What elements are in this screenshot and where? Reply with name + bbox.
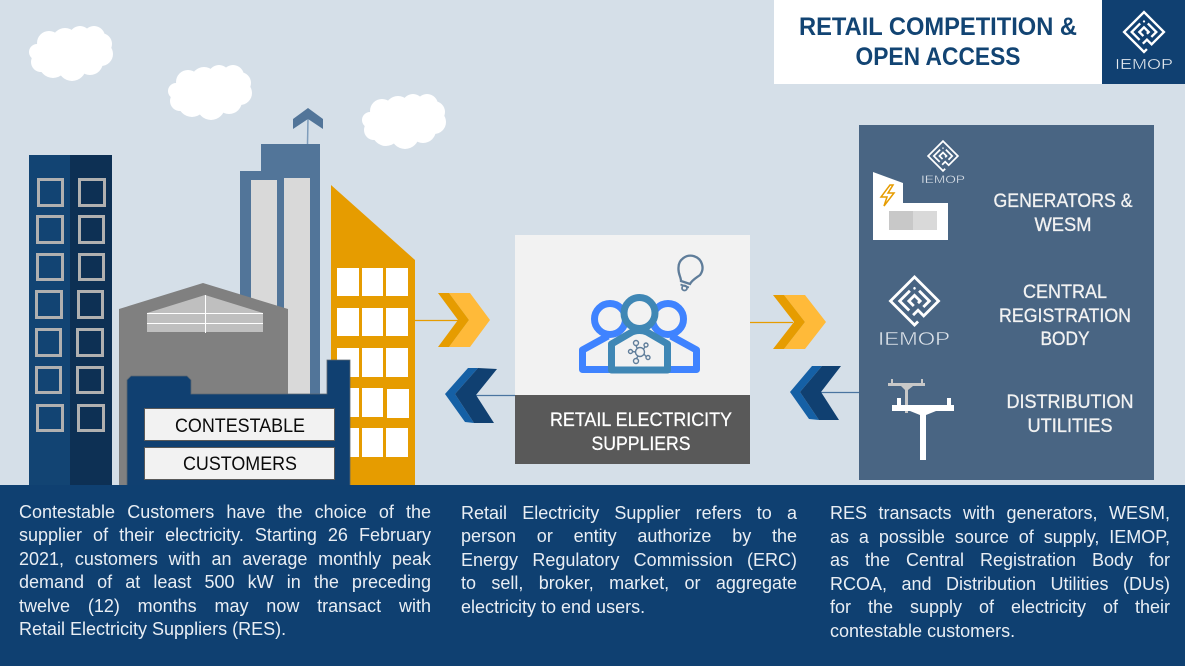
text block: contestable customers	[19, 502, 431, 639]
label: generators and WESM: WESM	[1034, 215, 1092, 236]
text block: contestable customers: demand of at least 500 kW in the preceding	[19, 572, 431, 592]
text block: RES transactions: for the supply of electricity of their	[830, 597, 1170, 617]
text block: retail electricity supplier definition	[461, 502, 797, 617]
icon: network node	[628, 340, 650, 364]
text block: retail electricity supplier definition: to sell, broker, market, or aggregate	[461, 573, 797, 593]
logo: IEMOP header: IEMOP	[1115, 56, 1173, 73]
logo: IEMOP header	[1102, 0, 1185, 84]
sign: contestable	[144, 408, 334, 440]
label: generators and WESM	[994, 191, 1133, 236]
text block: RES transactions: as the Central Registration Body for	[830, 550, 1170, 570]
label: generators and WESM: GENERATORS &	[994, 191, 1133, 212]
text block: RES transactions	[830, 503, 1170, 641]
text block: retail electricity supplier definition: Energy Regulatory Commission (ERC)	[461, 550, 797, 570]
building: contestable customers storefront	[127, 360, 350, 487]
icon: utility pole	[888, 379, 954, 460]
icon: generator plant with logo: IEMOP	[921, 174, 965, 186]
sign: customers: CUSTOMERS	[183, 453, 297, 475]
logo: IEMOP central registration body	[878, 277, 950, 349]
title panel	[774, 0, 1102, 84]
text block: RES transactions: RES transacts with generators, WESM,	[830, 503, 1170, 523]
text block: contestable customers: 2021, customers with an average monthly peak	[19, 549, 431, 569]
panel: retail electricity suppliers: RETAIL ELECTRICITY	[550, 409, 732, 431]
arrow: sources to suppliers	[790, 366, 859, 420]
label: central registration body: BODY	[1040, 329, 1090, 350]
icon: light bulb	[678, 256, 702, 290]
title panel: RETAIL COMPETITION &	[799, 13, 1077, 41]
icon: generator plant with logo	[873, 141, 965, 240]
text block: retail electricity supplier definition: person or entity authorize by the	[461, 526, 797, 546]
label: distribution utilities: DISTRIBUTION	[1006, 392, 1134, 413]
sign: customers	[144, 448, 334, 480]
label: distribution utilities	[1006, 392, 1134, 437]
text block: RES transactions: as a possible source of supply, IEMOP,	[830, 527, 1170, 547]
icon: people group	[582, 298, 696, 370]
text block: contestable customers: twelve (12) months may now transact with	[19, 596, 431, 616]
building: tall blue tower	[29, 155, 112, 487]
text block: contestable customers: Retail Electricity Suppliers (RES).	[19, 619, 286, 639]
sign: contestable: CONTESTABLE	[175, 415, 305, 437]
cloud: middle	[168, 65, 252, 120]
building: steel blue tower with arrow antenna	[240, 108, 323, 400]
arrow: customers to suppliers	[415, 293, 490, 347]
label: distribution utilities: UTILITIES	[1028, 416, 1112, 437]
panel: retail electricity suppliers	[515, 235, 750, 464]
panel: supply sources	[859, 125, 1154, 480]
text block: RES transactions: RCOA, and Distribution Utilities (DUs)	[830, 574, 1170, 594]
text block: RES transactions: contestable customers.	[830, 621, 1015, 641]
arrow: suppliers to customers	[445, 368, 515, 423]
building: grey warehouse	[119, 283, 288, 487]
text block: contestable customers: Contestable Customers have the choice of the	[19, 502, 431, 522]
title panel: OPEN ACCESS	[856, 43, 1020, 71]
text block: retail electricity supplier definition: Retail Electricity Supplier refers to a	[461, 502, 797, 522]
panel: retail electricity suppliers: SUPPLIERS	[592, 433, 690, 455]
logo: IEMOP central registration body: IEMOP	[878, 329, 950, 349]
bottom band	[0, 485, 1185, 666]
label: central registration body: REGISTRATION	[999, 306, 1131, 327]
cloud: top left	[29, 26, 113, 81]
building: orange tower	[331, 185, 415, 487]
text block: contestable customers: supplier of their electricity. Starting 26 February	[19, 525, 431, 545]
arrow: suppliers to sources	[750, 295, 826, 349]
label: central registration body: CENTRAL	[1023, 282, 1107, 303]
text block: retail electricity supplier definition: electricity to end users.	[461, 597, 645, 617]
cloud: right	[362, 94, 446, 149]
label: central registration body	[999, 282, 1131, 350]
